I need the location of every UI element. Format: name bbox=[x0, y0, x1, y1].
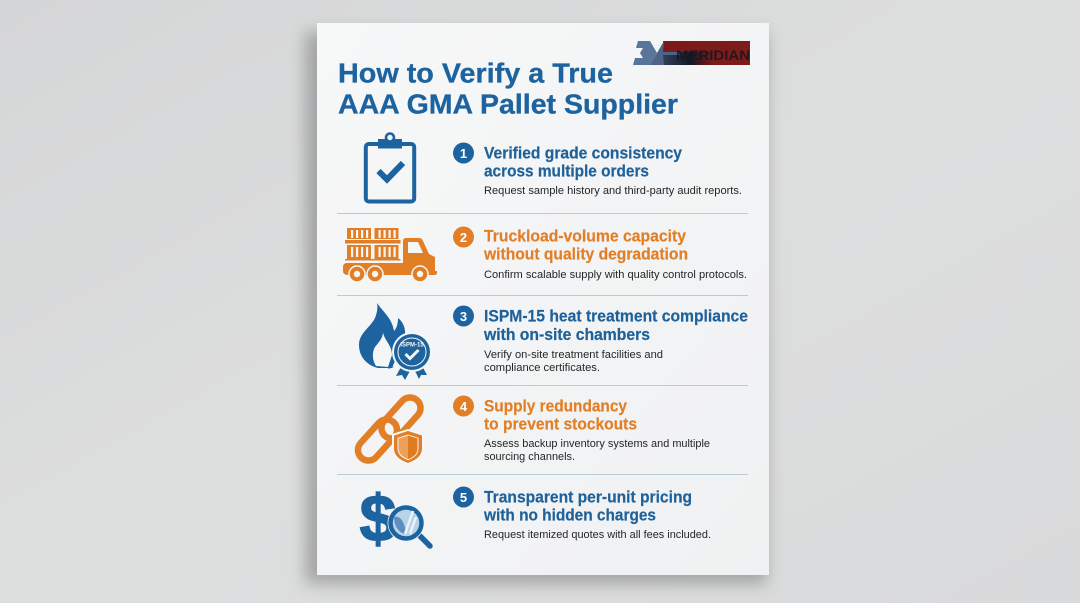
description bbox=[484, 438, 710, 463]
number badge 1: 1 bbox=[460, 146, 467, 161]
description: compliance certificates. bbox=[484, 362, 600, 374]
heading: ISPM-15 heat treatment compliance bbox=[484, 308, 748, 326]
icon: dollar sign with magnifier: $ bbox=[360, 481, 396, 555]
heading bbox=[484, 398, 637, 434]
title: How to Verify a True bbox=[338, 58, 613, 88]
heading: Transparent per-unit pricing bbox=[484, 488, 692, 506]
step 2: truckload-volume capacity bbox=[343, 226, 747, 282]
description bbox=[484, 349, 663, 374]
number badge 1 bbox=[453, 142, 474, 164]
number badge 2: 2 bbox=[460, 230, 467, 245]
heading: across multiple orders bbox=[484, 162, 649, 180]
title bbox=[338, 58, 678, 120]
heading: to prevent stockouts bbox=[484, 416, 637, 434]
step 5: transparent pricing bbox=[360, 481, 711, 555]
panel: poster card bbox=[317, 23, 769, 575]
icon: dollar sign with magnifier bbox=[360, 481, 430, 555]
icon: flame with certification seal bbox=[359, 303, 432, 380]
step 4: supply redundancy bbox=[354, 393, 710, 465]
logo: MERIDIAN bbox=[676, 48, 750, 63]
number badge 5: 5 bbox=[460, 490, 467, 505]
number badge 4: 4 bbox=[460, 399, 468, 414]
heading: Truckload-volume capacity bbox=[484, 228, 686, 246]
heading bbox=[483, 228, 688, 264]
description: Request sample history and third-party audit reports. bbox=[484, 185, 742, 197]
heading: Verified grade consistency bbox=[484, 144, 682, 162]
heading: with no hidden charges bbox=[483, 506, 656, 524]
description: Request itemized quotes with all fees included. bbox=[484, 529, 711, 541]
number badge 4 bbox=[453, 396, 474, 416]
heading bbox=[484, 144, 682, 180]
description: Verify on-site treatment facilities and bbox=[484, 349, 663, 361]
heading bbox=[483, 488, 692, 524]
icon: truck with pallets bbox=[343, 228, 437, 282]
logo bbox=[633, 41, 750, 65]
icon: flame with certification seal: ISPM-15 bbox=[400, 342, 424, 348]
step 3: ISPM-15 compliance bbox=[359, 303, 748, 380]
number badge 5 bbox=[453, 486, 474, 508]
icon: clipboard with check bbox=[366, 134, 414, 202]
step 1: verified grade consistency bbox=[366, 134, 742, 202]
description: Assess backup inventory systems and multiple bbox=[484, 438, 710, 450]
number badge 3 bbox=[453, 306, 474, 326]
description: sourcing channels. bbox=[484, 451, 575, 463]
heading bbox=[483, 308, 748, 344]
heading: without quality degradation bbox=[483, 246, 688, 264]
title: AAA GMA Pallet Supplier bbox=[338, 88, 678, 120]
number badge 2 bbox=[453, 226, 474, 248]
heading: Supply redundancy bbox=[484, 398, 627, 416]
number badge 3: 3 bbox=[460, 309, 467, 324]
heading: with on-site chambers bbox=[483, 326, 650, 344]
icon: chain link with shield bbox=[354, 393, 425, 465]
description: Confirm scalable supply with quality control protocols. bbox=[484, 269, 747, 281]
